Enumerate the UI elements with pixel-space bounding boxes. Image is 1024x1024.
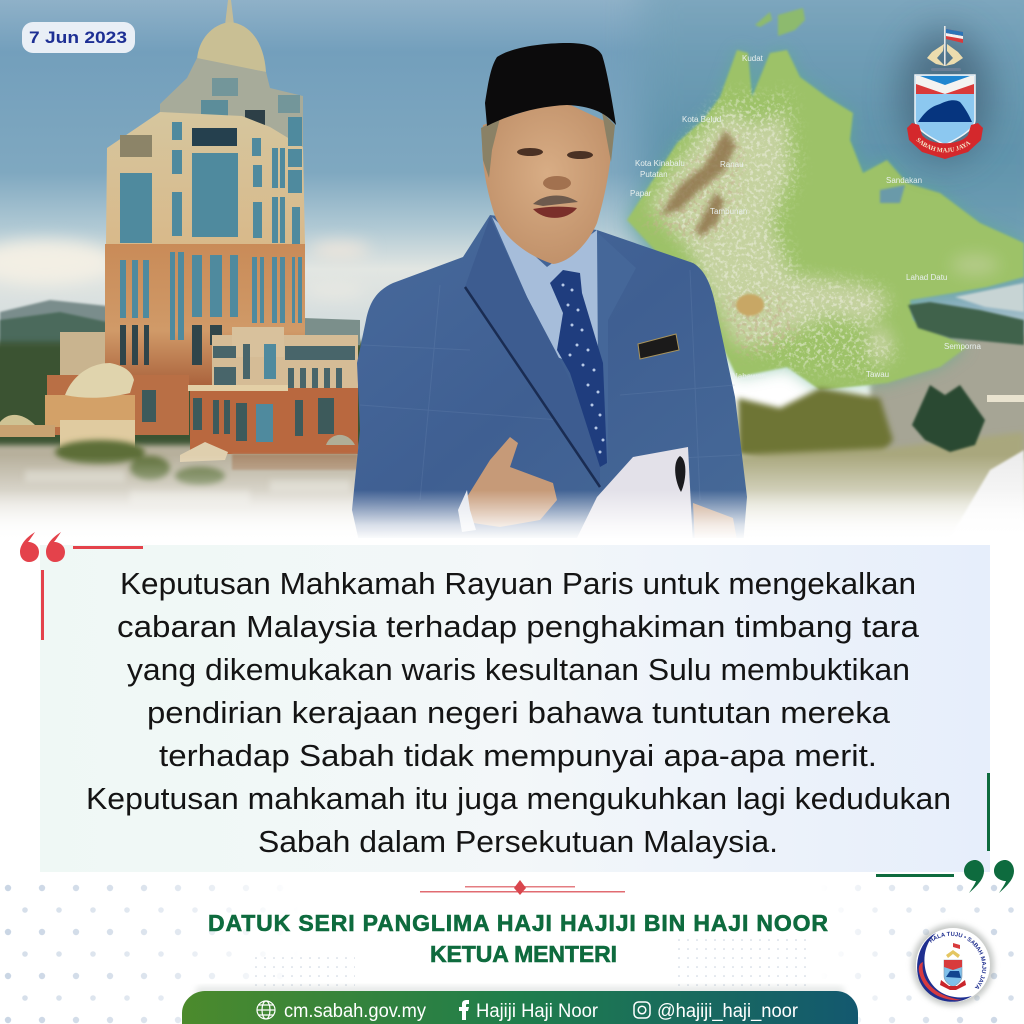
right podium upper: [212, 335, 358, 395]
flag pole: [944, 26, 946, 66]
photo collage: [0, 0, 1024, 546]
mini ribbon: [940, 980, 966, 990]
lower tower: [105, 244, 305, 389]
motto: SABAH MAJU JAYA: [916, 138, 971, 152]
round logo: [909, 921, 997, 1009]
mini chevron: [944, 960, 962, 970]
jetty: [987, 395, 1024, 402]
map labels: Kudat: [742, 54, 764, 63]
flag blue: [946, 29, 963, 36]
ribbon: [907, 123, 983, 159]
canopy: [180, 442, 228, 462]
land glow: [627, 50, 1024, 390]
brown plateau: [736, 294, 764, 316]
mini flag: [953, 943, 960, 949]
hat: [485, 43, 616, 126]
tower windows: [120, 117, 302, 340]
tie: [550, 270, 607, 467]
face and neck: [482, 100, 613, 264]
chief red left: [916, 84, 945, 94]
opening quote mark: [20, 532, 143, 640]
quote text: Keputusan mahkamah itu juga mengukuhkan lagi kedudukan: [86, 781, 951, 816]
cuff: [458, 490, 476, 532]
relief brown texture: [640, 125, 800, 360]
bottom white fade behind man: [0, 455, 1024, 546]
ring text: HALA TUJU • SABAH MAJU JAYA: [930, 932, 986, 989]
lapel seam: [465, 287, 600, 487]
instagram handle: @hajiji_haji_noor: [657, 1001, 799, 1022]
spire: [225, 0, 234, 25]
sky background: [0, 0, 1024, 345]
quote text: terhadap Sabah tidak mempunyai apa-apa merit.: [159, 738, 877, 773]
right lapel: [597, 232, 636, 470]
left podium drum: [45, 395, 135, 427]
social media bar: [182, 991, 858, 1024]
tie dots: [562, 284, 604, 454]
mini mountain: [946, 971, 961, 978]
suit: [352, 215, 747, 546]
map labels: Putatan: [640, 170, 668, 179]
entrance: [60, 420, 135, 448]
ground: [742, 432, 1024, 521]
motto path: [914, 138, 977, 152]
chief red right: [945, 84, 974, 94]
lake lower right: [870, 335, 1024, 460]
left podium tower: [60, 332, 105, 375]
distant hills left: [0, 298, 105, 346]
right hand: [693, 503, 738, 546]
shirt: [492, 217, 605, 375]
fine dot grid right: [675, 938, 810, 988]
mouth: [533, 207, 577, 218]
land: [627, 50, 1024, 390]
dark upper windows: [120, 128, 237, 157]
website: cm.sabah.gov.my: [284, 1001, 426, 1022]
quote text: pendirian kerajaan negeri bahawa tuntutan mereka: [147, 695, 891, 730]
map labels: Ranau: [720, 160, 744, 169]
map labels: Papar: [630, 189, 652, 198]
pale relief: [650, 110, 999, 363]
icon: facebook: [459, 1000, 469, 1020]
map labels: Nabawan: [732, 372, 766, 381]
ground below building: [0, 441, 358, 518]
speaker name: DATUK SERI PANGLIMA HAJI HAJIJI BIN HAJI NOOR: [208, 910, 828, 936]
map labels: Sandakan: [886, 176, 922, 185]
white base strip: [0, 538, 1024, 546]
icon: instagram: [634, 1002, 650, 1018]
hills right of tower: [303, 318, 360, 345]
white road: [964, 449, 1024, 520]
quote text: Keputusan Mahkamah Rayuan Paris untuk mengekalkan: [120, 566, 916, 601]
sky gap: [955, 283, 1024, 312]
large dome: [65, 363, 134, 398]
quote text: yang dikemukakan waris kesultanan Sulu membuktikan: [127, 652, 910, 687]
ring path: [931, 936, 982, 991]
map labels: [630, 54, 981, 381]
paper: [573, 447, 693, 546]
bottom white fade: [0, 490, 1024, 540]
quote text: cabaran Malaysia terhadap penghakiman timbang tara: [117, 609, 920, 644]
right small dome: [326, 435, 355, 445]
green hills: [908, 302, 1024, 345]
speaker name: KETUA MENTERI: [430, 941, 617, 967]
moustache: [533, 195, 578, 206]
right podium lower: [190, 388, 358, 454]
sea behind map: [640, 0, 1024, 320]
shield: [915, 75, 975, 145]
hills and shore lower right: [738, 283, 1024, 546]
date badge: [22, 22, 135, 53]
logo disc: [916, 928, 990, 1002]
base plinth: [232, 454, 358, 470]
Sabah coat of arms: [907, 26, 983, 159]
left lapel: [465, 217, 600, 487]
arms: [927, 44, 963, 66]
trees at foot: [55, 440, 225, 485]
upper tower: [106, 112, 305, 245]
bar shadow: [195, 986, 845, 998]
chief blue: [920, 76, 970, 85]
Menara Kinabalu building: [0, 0, 360, 545]
trees: [912, 385, 985, 452]
map labels: Tambunan: [710, 207, 747, 216]
flag red: [946, 29, 963, 43]
podium cornice: [188, 385, 288, 391]
paper hole: [675, 456, 685, 492]
dark base windows: [120, 325, 222, 365]
man portrait: [352, 43, 747, 546]
decorative dots left: [0, 872, 300, 1024]
mountains left: [0, 312, 107, 345]
quotation panel: [40, 545, 990, 872]
lower windows: [142, 390, 334, 442]
suit checks: [360, 270, 740, 500]
clouds: [0, 240, 370, 298]
wreath: [931, 68, 961, 71]
icon: globe: [257, 1001, 275, 1019]
crescent red: [919, 962, 962, 1000]
left dome podium: [47, 375, 189, 435]
base left: [0, 425, 55, 437]
islands: [755, 8, 805, 36]
closing quote mark: [876, 773, 1014, 893]
hair: [481, 112, 615, 178]
relief white texture: [650, 90, 900, 375]
hand: [467, 437, 557, 527]
quote text: [86, 566, 951, 859]
flag white: [946, 33, 963, 39]
facebook name: Hajiji Haji Noor: [476, 1001, 599, 1022]
logo shadow: [912, 924, 994, 1006]
divider ornament: [420, 880, 625, 895]
right podium windows: [213, 344, 355, 388]
bays: [880, 185, 905, 203]
mini arms: [946, 950, 960, 958]
fine dot grid left: [255, 950, 355, 990]
decorative dots right: [820, 872, 1024, 1024]
crown glass: [201, 78, 300, 126]
crescent blue: [917, 933, 972, 1002]
mountain: [918, 100, 972, 122]
map labels: Kota Kinabalu: [635, 159, 685, 168]
shield chief white: [916, 76, 974, 94]
date badge: 7 Jun 2023: [29, 28, 127, 47]
map labels: Lahad Datu: [906, 273, 947, 282]
crown: [160, 58, 303, 150]
main dome: [197, 22, 266, 72]
map labels: Tawau: [866, 370, 889, 379]
nose shadow: [543, 176, 571, 190]
right podium top tower: [232, 327, 284, 357]
trees and land left: [0, 342, 370, 452]
quote text: Sabah dalam Persekutuan Malaysia.: [258, 824, 778, 859]
speaker name: [208, 910, 828, 967]
low walls: [25, 470, 350, 504]
brown mountains: [660, 130, 736, 236]
shrubs: [738, 388, 893, 470]
eyes: [517, 148, 593, 159]
map labels: Semporna: [944, 342, 981, 351]
map labels: Kota Belud: [682, 115, 721, 124]
mini shield: [944, 960, 962, 987]
map of Sabah: [627, 8, 1024, 390]
crest halo: [900, 30, 990, 160]
name badge: [638, 334, 679, 359]
small dome left: [0, 415, 35, 428]
